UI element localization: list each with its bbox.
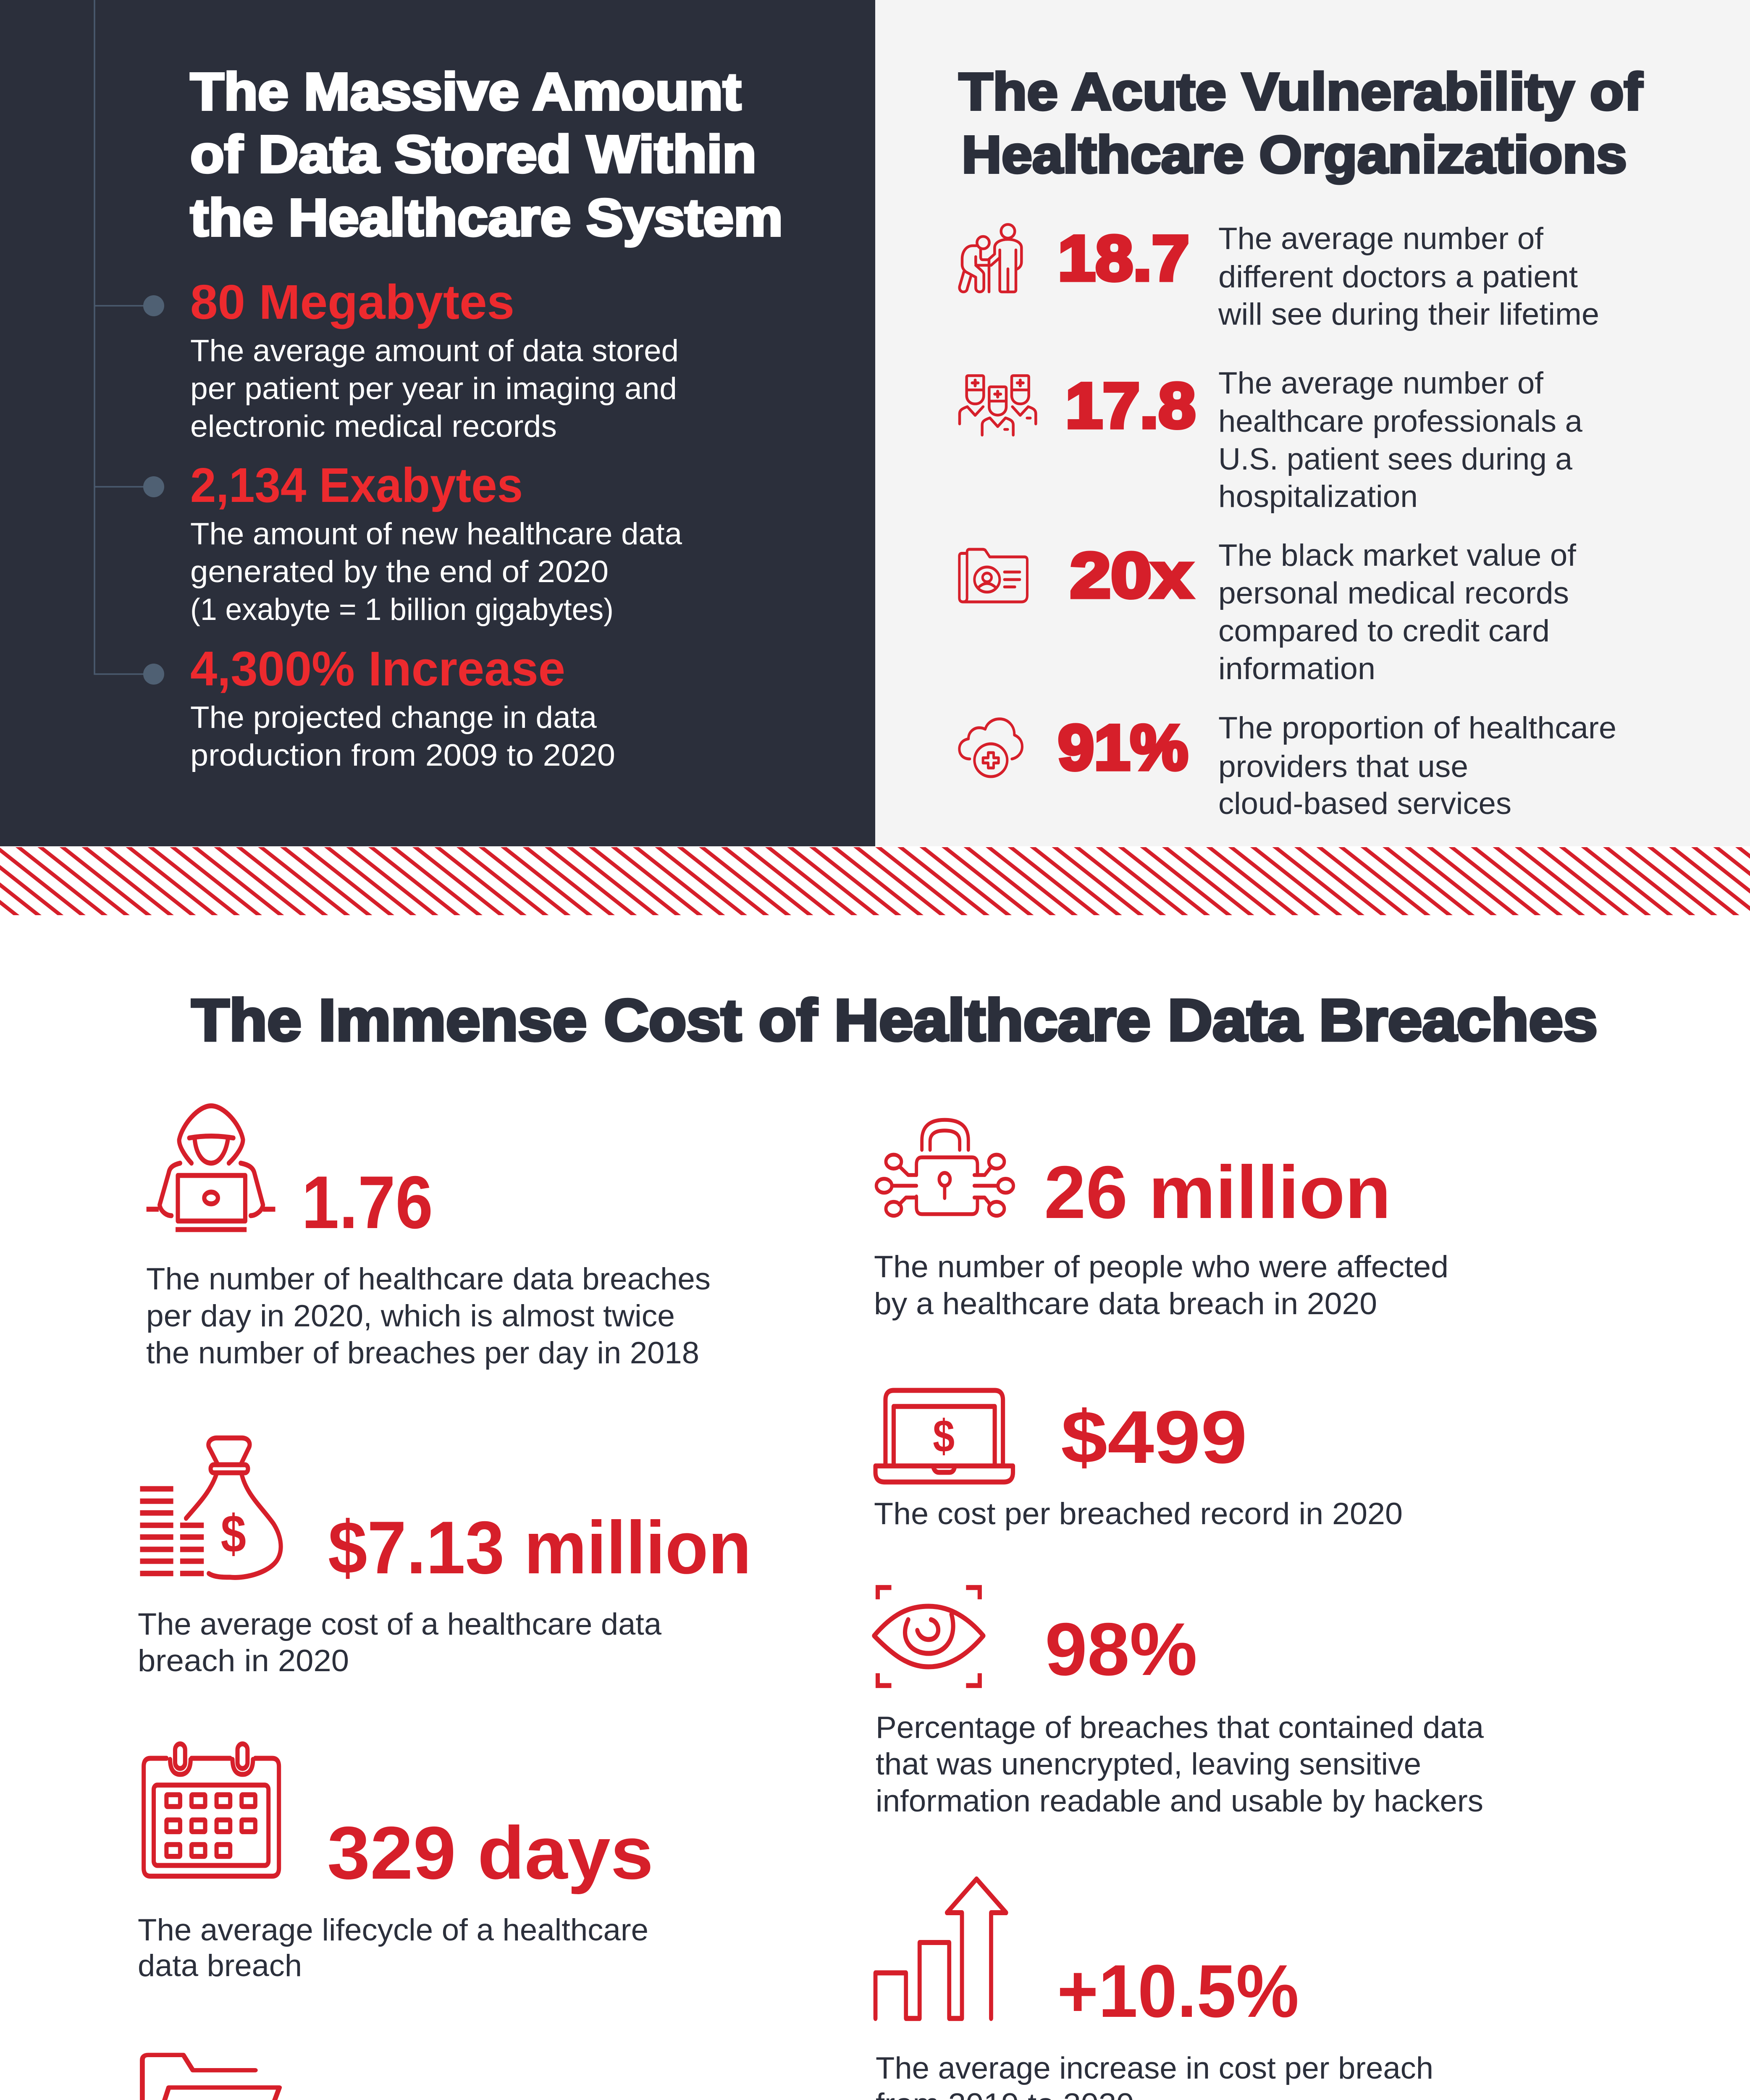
stat: 4,300% increase: The projected change in data (190, 701, 597, 735)
description: 98%: information readable and usable by hackers (876, 1784, 1483, 1818)
heading: massive amount of data (190, 63, 783, 247)
stat block: 1.76 breaches (146, 1106, 711, 1370)
description: 17.8: U.S. patient sees during a (1218, 442, 1572, 476)
icon: hacker at laptop (147, 1106, 275, 1230)
stat block: $499 (874, 1390, 1403, 1531)
heading: acute vulnerability (959, 63, 1642, 184)
description: 1.76: per day in 2020, which is almost twice (146, 1299, 675, 1333)
description: 98%: Percentage of breaches that contained data (876, 1711, 1484, 1745)
description: 26 million: The number of people who were affected (874, 1250, 1448, 1284)
heading: acute vulnerability: Healthcare Organizations (962, 126, 1627, 184)
description: 17.8 (1218, 366, 1582, 514)
number: 1.76: 1.76 (302, 1160, 433, 1244)
description: 329 days: The average lifecycle of a healthcare (138, 1913, 648, 1947)
description: 91% (1218, 711, 1616, 821)
number: 98%: 98% (1045, 1607, 1197, 1691)
number: 17.8: 17.8 (1065, 370, 1196, 441)
panel: acute vulnerability (875, 0, 1750, 846)
description: 20x: compared to credit card (1218, 614, 1550, 648)
stat row: 18.7 doctors (960, 222, 1599, 331)
stat: 2,134 exabytes: generated by the end of 2020 (190, 555, 609, 589)
stat: 80 megabytes: electronic medical records (190, 410, 557, 444)
number: +10.5%: +10.5% (1057, 1949, 1299, 2033)
heading: immense cost: The Immense Cost of Healthcare Data Breaches (192, 987, 1598, 1053)
description: 17.8: The average number of (1218, 366, 1544, 400)
stat: 2,134 exabytes: (1 exabyte = 1 billion gigabytes) (190, 593, 614, 627)
description: $7.13 million (138, 1607, 661, 1678)
stat: 4,300% increase: 4,300% Increase (190, 641, 565, 696)
stat: 2,134 exabytes: 2,134 Exabytes (190, 458, 523, 512)
description: $499: The cost per breached record in 2020 (874, 1497, 1403, 1531)
number: $499: $499 (1061, 1395, 1247, 1479)
stat: 80 megabytes: 80 Megabytes (190, 275, 514, 329)
icon: padlock circuit (876, 1120, 1013, 1216)
description: 98%: that was unencrypted, leaving sensitive (876, 1747, 1421, 1781)
icon: doctor and elderly patient (960, 224, 1021, 292)
heading: massive amount of data: the Healthcare System (190, 189, 783, 247)
description: 91%: The proportion of healthcare (1218, 711, 1616, 745)
description: 1.76: The number of healthcare data breaches (146, 1262, 711, 1296)
description: $7.13 million: breach in 2020 (138, 1644, 349, 1678)
heading: acute vulnerability: The Acute Vulnerability of (959, 63, 1642, 121)
icon: rising bars with arrow (876, 1879, 1006, 2019)
icon: medical cloud (959, 719, 1022, 777)
description: 1.76 (146, 1262, 711, 1370)
number: 18.7: 18.7 (1058, 223, 1189, 294)
heading: massive amount of data: The Massive Amount (190, 63, 741, 121)
icon: medical record folder (959, 549, 1027, 602)
icon: locked folder (142, 2055, 279, 2100)
description: 20x: information (1218, 652, 1375, 686)
stat: 4,300% increase: production from 2009 to 2020 (190, 738, 615, 772)
stat block: 329 days (138, 1744, 653, 1983)
stat: 2,134 exabytes (190, 458, 682, 627)
stat block: 26 million (874, 1120, 1448, 1321)
description: +10.5% (876, 2051, 1433, 2100)
description: $7.13 million: The average cost of a healthcare data (138, 1607, 661, 1641)
number: 329 days: 329 days (327, 1811, 653, 1895)
stat: 2,134 exabytes: The amount of new healthcare data (190, 517, 682, 551)
heading: massive amount of data: of Data Stored Within (190, 125, 756, 184)
description: 18.7: The average number of (1218, 222, 1544, 256)
description: 329 days (138, 1913, 648, 1983)
description: 18.7: will see during their lifetime (1218, 297, 1599, 331)
stat row: 17.8 professionals (960, 366, 1582, 514)
description: 1.76: the number of breaches per day in 2018 (146, 1336, 699, 1370)
description: 20x: The black market value of (1218, 538, 1577, 572)
description: 91%: providers that use (1218, 750, 1468, 784)
stat row: 20x black market value (959, 538, 1577, 686)
stat block: +10.5% (876, 1879, 1433, 2100)
icon: money bag and coins (140, 1438, 281, 1578)
number: 91%: 91% (1058, 712, 1188, 783)
timeline connector (94, 0, 164, 685)
stat block: 98% (874, 1588, 1484, 1818)
description: 98% (876, 1711, 1484, 1818)
description: 26 million: by a healthcare data breach in 2020 (874, 1287, 1377, 1321)
stat: 4,300% increase (190, 641, 615, 772)
number: 26 million: 26 million (1044, 1150, 1391, 1234)
description: 20x (1218, 538, 1577, 686)
description: 17.8: healthcare professionals a (1218, 404, 1582, 438)
description: 18.7: different doctors a patient (1218, 260, 1578, 294)
stat: 80 megabytes (190, 275, 679, 444)
icon: eye scan (874, 1588, 984, 1685)
stat block: $7.13 million (138, 1438, 751, 1678)
stat: 80 megabytes: The average amount of data stored (190, 334, 679, 368)
description: 329 days: data breach (138, 1949, 302, 1983)
number: 20x: 20x (1070, 540, 1192, 611)
description: 17.8: hospitalization (1218, 480, 1418, 514)
panel: massive amount of data (0, 0, 875, 846)
description: +10.5%: The average increase in cost per breach (876, 2051, 1433, 2085)
description: 18.7 (1218, 222, 1599, 331)
stat row: 91% cloud (959, 711, 1616, 821)
description: 20x: personal medical records (1218, 576, 1569, 610)
icon: money bag and coins: $ (221, 1504, 246, 1564)
description: 91%: cloud-based services (1218, 787, 1511, 821)
stat: 80 megabytes: per patient per year in imaging and (190, 372, 677, 406)
icon: three nurses (960, 375, 1036, 435)
diagonal stripe divider (0, 847, 1750, 915)
stat block: 17,000 (138, 2055, 567, 2100)
icon: laptop with dollar (876, 1390, 1013, 1482)
icon: calendar (144, 1744, 279, 1876)
icon: laptop with dollar: $ (933, 1410, 955, 1462)
description: 26 million (874, 1250, 1448, 1321)
number: $7.13 million: $7.13 million (328, 1506, 751, 1589)
